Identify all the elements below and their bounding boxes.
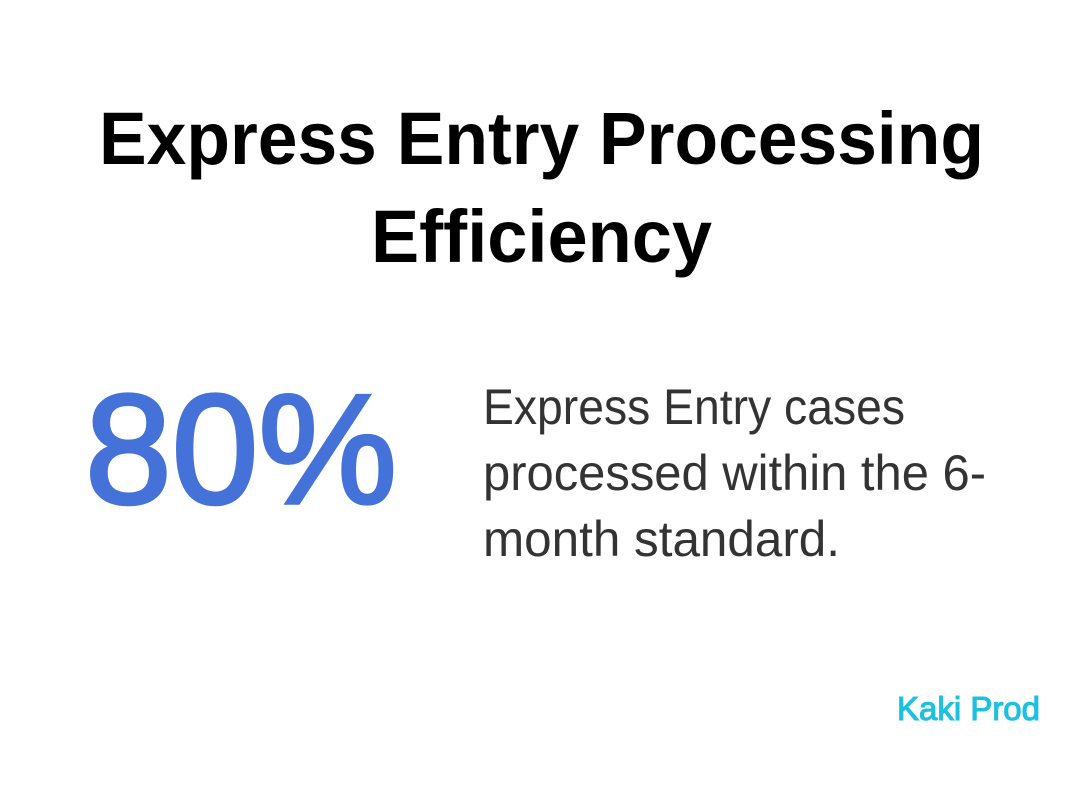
description text: Express Entry cases [483, 379, 905, 435]
statistic: 80%: 80% [85, 363, 397, 537]
logo: Kaki Prod: Kaki Prod [897, 690, 1040, 727]
title: Express Entry Processing [99, 97, 984, 180]
title: Efficiency [371, 195, 712, 278]
description text: processed within the 6- [483, 445, 986, 501]
description text: month standard. [483, 511, 840, 567]
description text [483, 379, 986, 567]
title [99, 97, 984, 278]
